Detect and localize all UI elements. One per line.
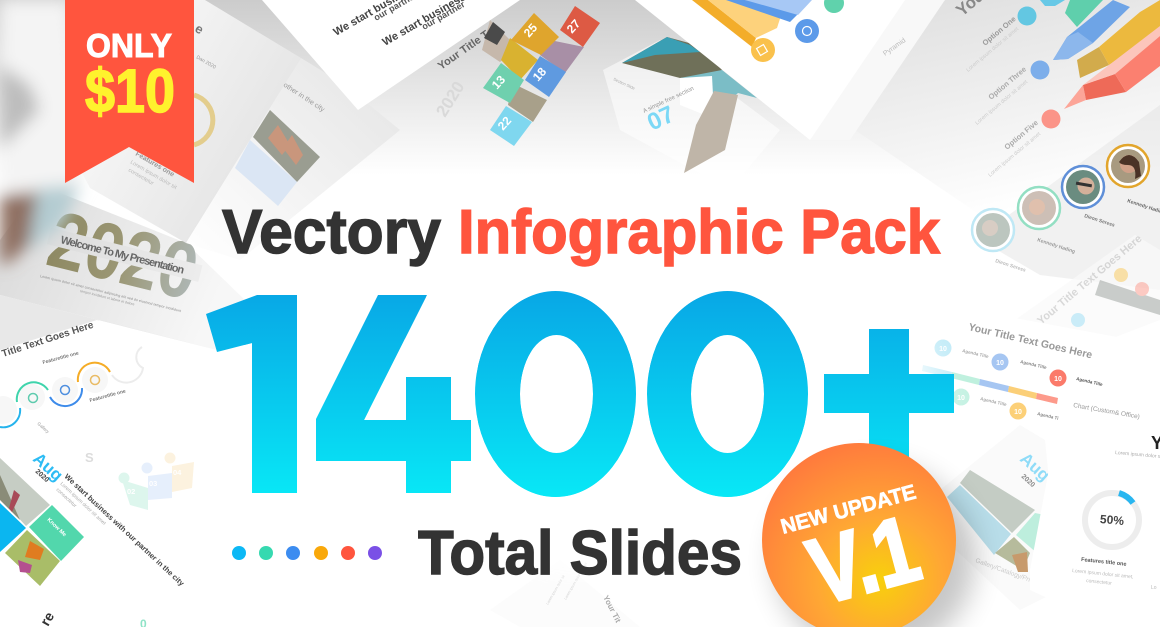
panel: title slide with colour tiles [432,6,600,146]
option three: Lorem ipsum dolor sit amet [974,79,1029,127]
agenda bubbles: 10 [939,346,947,353]
agenda bubbles [934,340,1066,420]
green tile: Know Me [46,517,67,538]
panel: Aug slide left: 2020 [34,468,50,484]
panel: agenda slide: Agenda Title [980,396,1008,407]
badge shadow [775,465,975,627]
big number: 1400+: + [808,169,972,560]
option five: Lorem ipsum dolor sit amet [987,131,1042,179]
icon: blue badge [795,19,819,43]
icon: yellow badge [751,38,775,62]
panel: agenda slide: Agenda Title [1076,376,1104,387]
panel: faint text slide bottom: Lorem ipsum dolor sit [545,575,566,606]
panel: 2020 welcome slide: Lorem ipsum dolor sit amet consectetur adipiscing elit sed do eiusmod tempor incididunt [40,274,181,313]
heading: Vectory Infographic Pack [222,198,940,267]
panel: team avatars slide: Dieon Seress [1083,213,1116,229]
big number: 1400+: 0 [635,179,820,571]
photo: person by the lake [0,458,50,526]
panel: ring chart slide [65,0,301,243]
panel: agenda slide: Agenda Title [1020,359,1048,370]
option five [987,110,1060,179]
price ribbon [65,0,194,183]
panel: team avatars slide: Kennedy Hading [1036,237,1076,255]
panel: gallery slide right: Aug [1016,449,1054,485]
panel: salmon photo slide: other in the city [282,82,326,114]
panel: Aug slide left: Lorem ipsum dolor sit amet [59,481,107,527]
big number: 1400+ [206,291,954,497]
agenda bubbles: 10 [1054,376,1062,383]
decorative colour dots [232,546,382,560]
heading: Vectory Infographic Pack: Infographic Pack [458,198,940,267]
avatar: green ring [1018,187,1060,229]
badge: new update V.1 [762,443,956,627]
agenda bubbles: 10 [996,360,1004,367]
panel: chart slide: Chart (Custom& Office) [1073,402,1140,421]
green tile [29,505,84,561]
panel: blurred photo slide top left [0,0,85,265]
panel: chart slide: consectetur [1086,578,1112,587]
panel: section 07 arrow slide: A simple free section [642,86,695,115]
panel: team avatars slide: Dieon Seress [994,258,1027,274]
tile: 22 [490,106,532,146]
panel: Aug slide left [0,412,187,627]
panel: process flow slide left: Featuretitle one [42,350,80,366]
panel: ring chart slide: Lorem ipsum dolor sit [129,160,178,191]
tile: 13: 13 [489,72,508,92]
panel: process flow slide left: Featuretitle one [89,388,127,404]
panel: agenda slide: Agenda Title [1037,411,1065,422]
tile: 22: 22 [495,113,514,133]
panel: gallery slide right: Gallery/Catalogy/Print [974,557,1036,586]
panel: options slide right: Pyramid [882,37,907,58]
panel: section 07 arrow slide: 07 [643,101,679,136]
panel: faint step chart slide: 04 [173,468,182,477]
big number: 1400+: 1 [190,180,354,571]
panel: ring chart slide: consectetur [127,168,155,187]
tile: 27: 27 [564,16,583,36]
icon: teal badge [824,0,844,13]
agenda bubbles: 10 [957,395,965,402]
panel: Aug slide left: We start business with our partner in the city [63,472,187,588]
donut chart: 50% [1099,512,1125,528]
arrow photo: mountain and sea [622,37,757,173]
panel: agenda slide: Your Title Text Goes Here [967,321,1094,361]
panel: salmon photo slide [186,58,400,260]
panel: agenda slide [922,305,1160,422]
panel: chart slide: Lorem ipsum dolor sit amet, [1072,568,1134,580]
panel: 3D arrow slide top center [635,0,945,140]
panel: faint text slide bottom: Your Tit [601,594,623,624]
tile: 25 [511,13,559,55]
option three: Option Three [987,65,1028,102]
top gray backdrop [0,0,1160,175]
2020 photo numerals: 2020 [40,194,207,317]
tile: 13 [483,63,524,103]
panel: ring chart slide: e [192,21,206,37]
agenda bubbles: 10 [1014,409,1022,416]
badge: new update V.1: NEW UPDATE [778,481,919,539]
option three [974,60,1050,127]
panel: faint step chart slide: S [85,450,94,465]
option one [965,6,1036,74]
big number: 1400+: 4 [313,180,477,571]
price ribbon: ONLY [86,27,172,64]
panel: 2020 welcome slide: tempor incididunt ut labore et dolore [80,289,135,306]
panel: faint text slide bottom [490,560,640,627]
panel: section 07 arrow slide: Section Slide [613,76,637,91]
panel: faint step chart slide [85,450,194,510]
panel: faint step chart slide: 02 [127,487,135,496]
agenda bar [922,365,1058,404]
panel: options slide right [810,0,1160,225]
flow rings [0,347,143,427]
avatar: yellow ring [1107,145,1149,187]
heading: Total Slides: Total Slides [418,519,742,588]
panel: process flow slide left [0,320,170,440]
panel: Aug slide left: Aug [29,449,67,485]
panel: timeline slide behind: Your Title Text Goes Here [1035,233,1145,327]
panel: timeline slide behind [1015,233,1160,345]
panel: ring chart slide: Features one [134,151,175,179]
photo: butterfly [5,530,60,586]
badge: new update V.1: V.1 [798,496,929,624]
tile: 18: 18 [530,64,549,84]
tile: 25: 25 [521,20,540,40]
donut chart [1085,493,1139,547]
panel: chart slide [1030,400,1160,627]
panel: agenda slide: Agenda Title [962,348,990,359]
panel: chart slide: Features title one [1081,557,1127,568]
panel: title slide with colour tiles: 2020 [432,78,468,120]
panel: chart slide: Lo [1151,585,1157,591]
option one: Lorem ipsum dolor sit amet [965,26,1020,74]
panel: gallery slide right [940,425,1060,610]
panel: ring chart slide: Dan 2020 [195,55,217,71]
panel: team avatars slide [972,105,1160,290]
panel: faint text slide bottom: Lorem ipsum dolor sit amet [563,562,588,600]
panel: faint step chart slide: 03 [149,479,157,488]
white glow behind headline [240,225,940,575]
panel: title slide with colour tiles: Your Title Te [436,25,496,72]
option one: Option One [981,14,1018,48]
price ribbon: $10 [85,57,175,125]
blue tile [0,503,26,552]
tile: 27 [560,6,600,47]
tile photos [482,20,584,122]
panel: process flow slide left: Title Text Goes Here [1,320,95,360]
option five: Option Five [1003,118,1040,152]
panel: white text slide top [262,0,520,110]
heading: Vectory Infographic Pack: Vectory [222,198,441,267]
panel: 2020 welcome slide [0,185,245,350]
big number: 1400+: 0 [463,179,648,571]
panel: gallery slide right: 2020 [1020,473,1036,489]
tile: 18 [525,56,566,97]
pyramid arrows [1040,0,1160,109]
avatar: cyan ring [972,209,1014,251]
panel: Aug slide left: consectetur [55,487,78,509]
avatar: blue ring [1062,166,1104,208]
panel: 2020 welcome slide: Welcome To My Presentation [59,234,186,277]
panel: white text slide top: our partner [420,0,467,32]
panel: section 07 arrow slide [603,37,780,190]
panel: Aug slide left: Gallery [36,421,51,435]
